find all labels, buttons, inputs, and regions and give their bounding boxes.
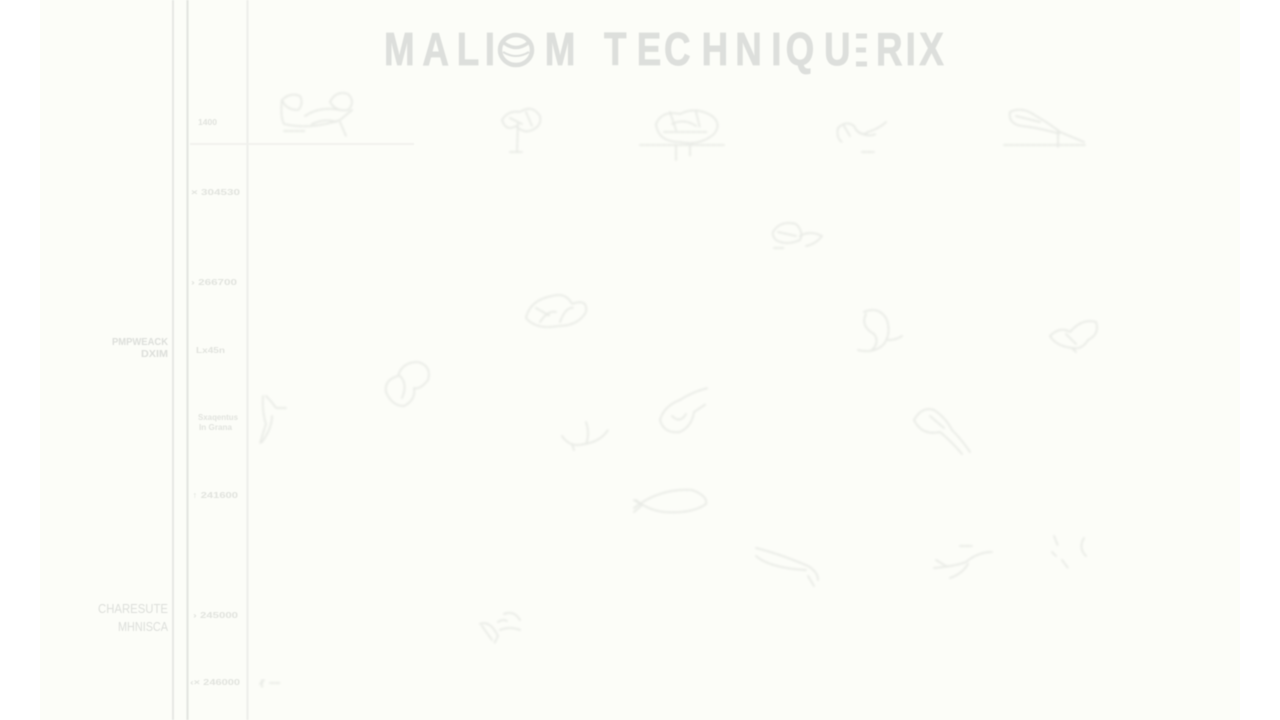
row labels: ‹× 246000 xyxy=(190,677,240,687)
title letter E and RIX: RIX xyxy=(876,23,944,75)
row labels: › 266700 xyxy=(191,277,237,287)
side label: top group: DXIM xyxy=(141,349,168,360)
icon: long lizard xyxy=(1004,110,1086,147)
icon: tall creature xyxy=(386,362,429,406)
icon: round crab on stand xyxy=(640,110,724,160)
title: MALI xyxy=(384,23,495,75)
row labels: × 304530 xyxy=(191,187,240,197)
icon: running lizard xyxy=(934,546,992,578)
axis lines xyxy=(173,0,414,720)
side label: bottom group: CHARESUTE xyxy=(98,601,168,616)
icon: curled creature xyxy=(858,310,902,351)
icon: reptile mound xyxy=(526,295,586,327)
icon: long fish xyxy=(756,548,818,586)
icon: fish xyxy=(634,490,706,512)
icon: diagonal lizard xyxy=(914,409,970,454)
icon: palm tree xyxy=(502,109,540,152)
icon: small curved fish xyxy=(562,422,608,450)
icon: small cluster xyxy=(773,223,822,248)
icon: title letter O bowl xyxy=(500,35,532,65)
row labels xyxy=(190,117,240,687)
row labels: › 245000 xyxy=(193,610,238,620)
icon: tiny mark xyxy=(260,680,280,687)
row labels: Sxaqentus xyxy=(198,412,238,422)
side label: bottom group xyxy=(98,601,168,634)
icon: scattered specks xyxy=(1052,536,1086,568)
row labels: 1400 xyxy=(198,117,217,127)
icon: seahorse figure xyxy=(260,396,286,444)
icon: bird sketch xyxy=(838,122,886,152)
icon: four-leaf cluster xyxy=(1050,321,1097,352)
icon: diving animal xyxy=(660,388,708,432)
icon: small bottom creature xyxy=(480,613,520,644)
title xyxy=(384,23,944,75)
row labels: In Grana xyxy=(199,422,232,432)
icon: bath creature xyxy=(281,93,352,136)
row labels: ↑ 241600 xyxy=(192,490,238,500)
title: M TECHNIQU xyxy=(545,23,851,75)
row labels: Lx45n xyxy=(196,345,225,355)
side label: bottom group: MHNISCA xyxy=(118,619,168,634)
side label: top group: PMPWEACK xyxy=(112,337,169,348)
side label: top group xyxy=(112,337,169,360)
